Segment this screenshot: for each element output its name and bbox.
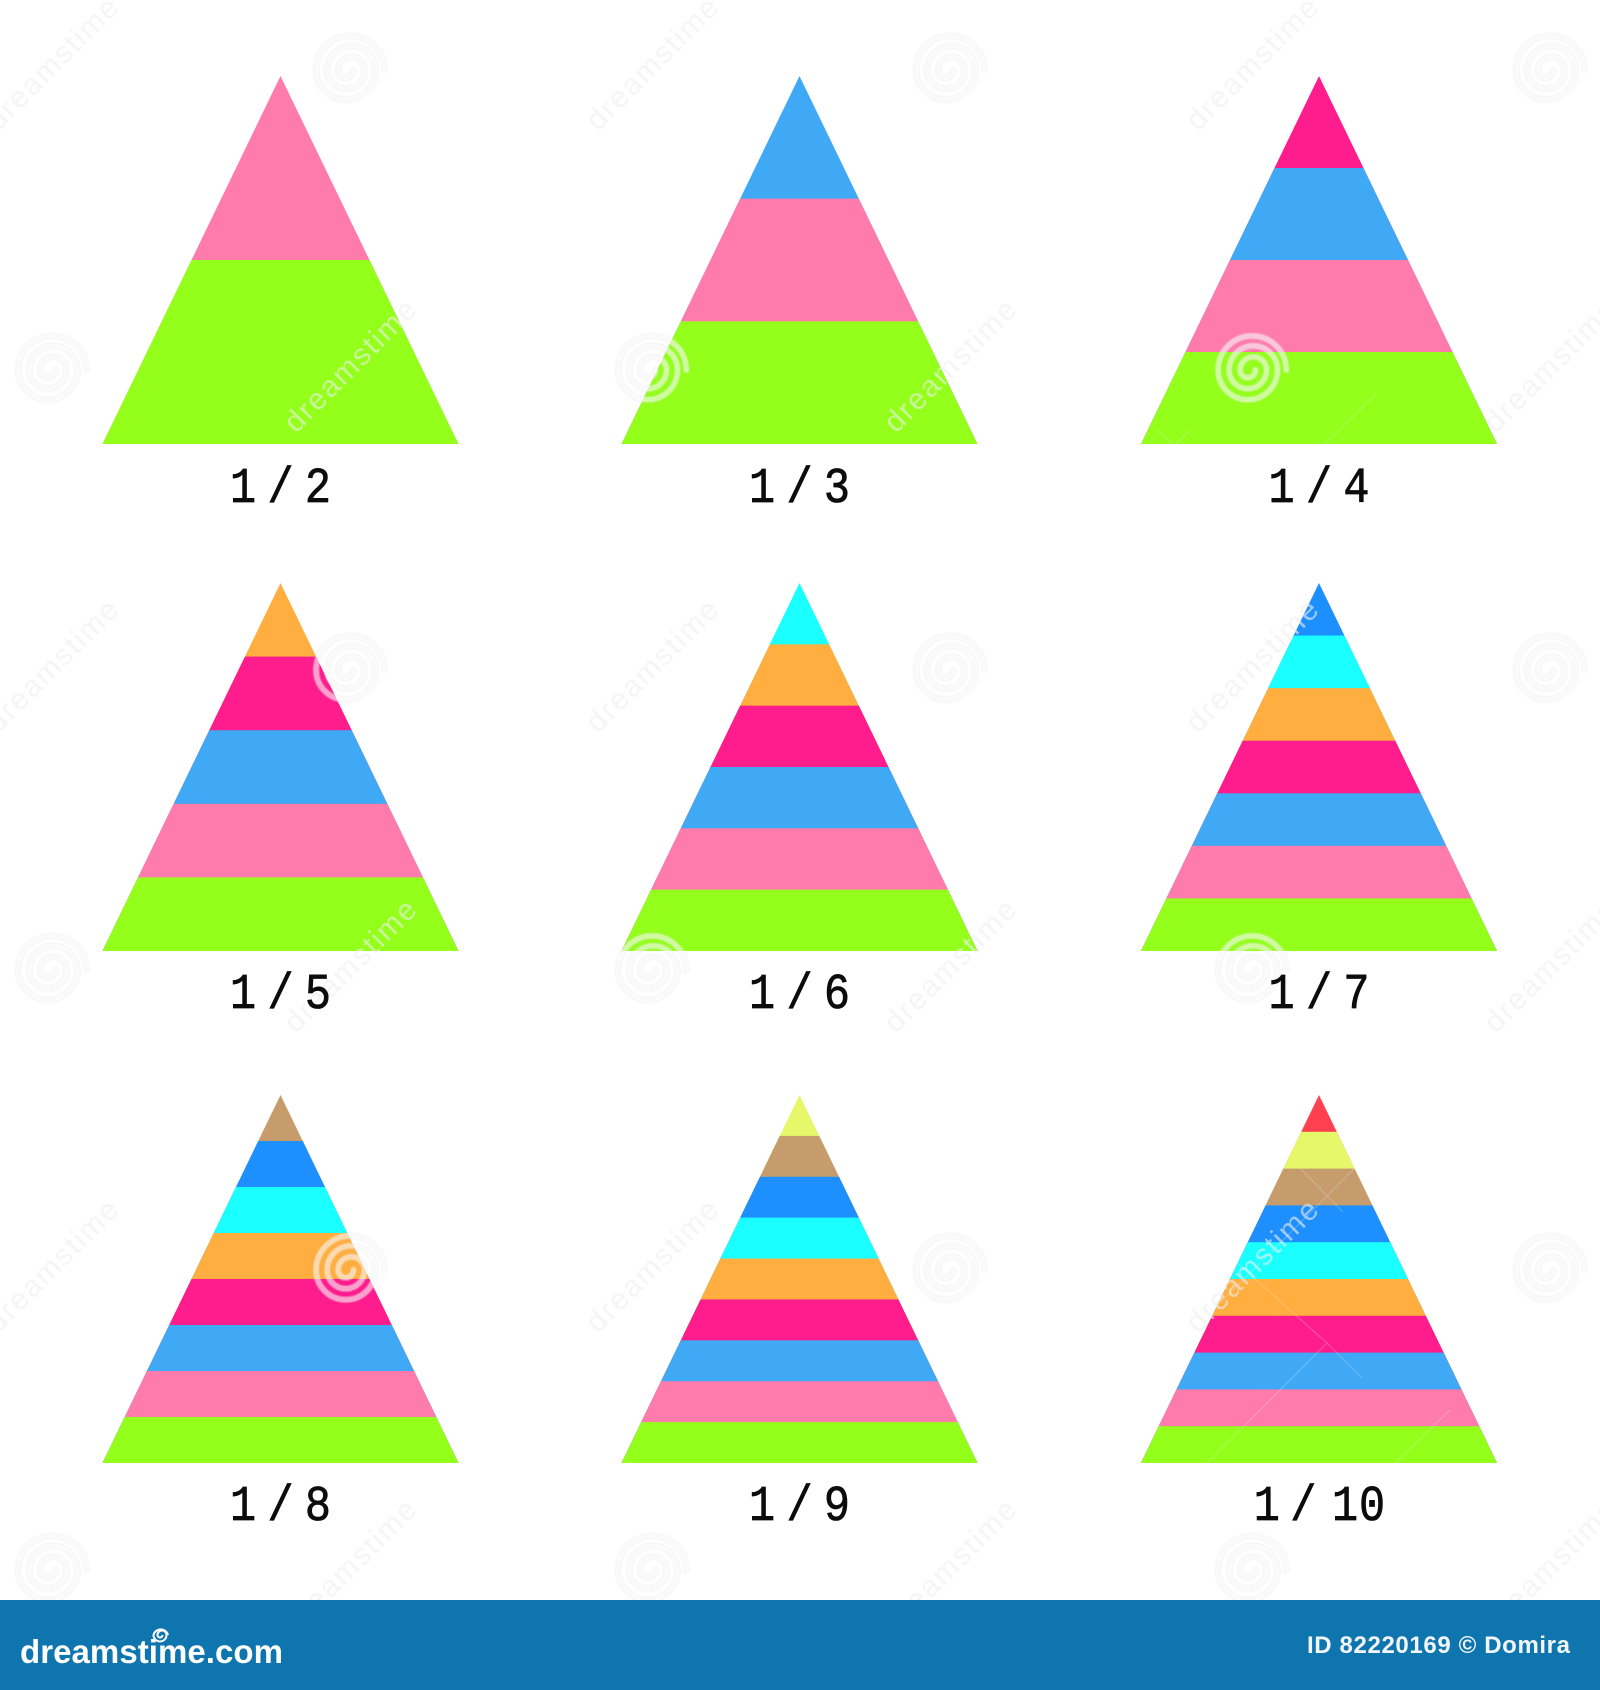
pyramid: 1/10 <box>1141 1095 1497 1463</box>
pyramid: 1/9 <box>622 1095 978 1463</box>
watermark layer: dreamstime <box>878 892 1024 1039</box>
pyramid: 1/3 <box>622 76 978 444</box>
footer logo text: dreamstime.com <box>20 1633 283 1670</box>
label: 1/7: 1 / 7 <box>1269 967 1369 1024</box>
label: 1/5: 1 / 5 <box>230 967 331 1024</box>
label: 1/2: 1 / 2 <box>230 461 331 518</box>
label: 1/3: 1 / 3 <box>749 461 850 518</box>
label: 1/6: 1 / 6 <box>749 967 850 1024</box>
icon: logo spiral <box>154 1629 168 1642</box>
watermark layer: dreamstime <box>278 1492 424 1639</box>
footer image id credit: ID 82220169 © Domira <box>1307 1632 1571 1659</box>
label: 1/9: 1 / 9 <box>749 1479 850 1536</box>
pyramid: 1/8 <box>102 1095 458 1463</box>
watermark layer: dreamstime <box>580 1192 726 1339</box>
watermark layer: dreamstime <box>878 1492 1024 1639</box>
pyramid: 1/2 <box>102 76 458 444</box>
label: 1/8: 1 / 8 <box>230 1479 331 1536</box>
pyramid: 1/5 <box>102 583 458 951</box>
watermark layer: dreamstime <box>1180 592 1326 739</box>
label: 1/4: 1 / 4 <box>1269 461 1369 518</box>
pyramid: 1/7 <box>1141 583 1497 951</box>
watermark layer: dreamstime <box>1180 1192 1326 1339</box>
watermark layer: dreamstime <box>878 292 1024 439</box>
watermark layer: dreamstime <box>278 892 424 1039</box>
footer banner <box>0 1600 1600 1690</box>
label: 1/10: 1 / 10 <box>1254 1479 1385 1536</box>
watermark layer: dreamstime <box>278 292 424 439</box>
pyramid: 1/6 <box>622 583 978 951</box>
watermark layer: dreamstime <box>580 592 726 739</box>
pyramid: 1/4 <box>1141 76 1497 444</box>
